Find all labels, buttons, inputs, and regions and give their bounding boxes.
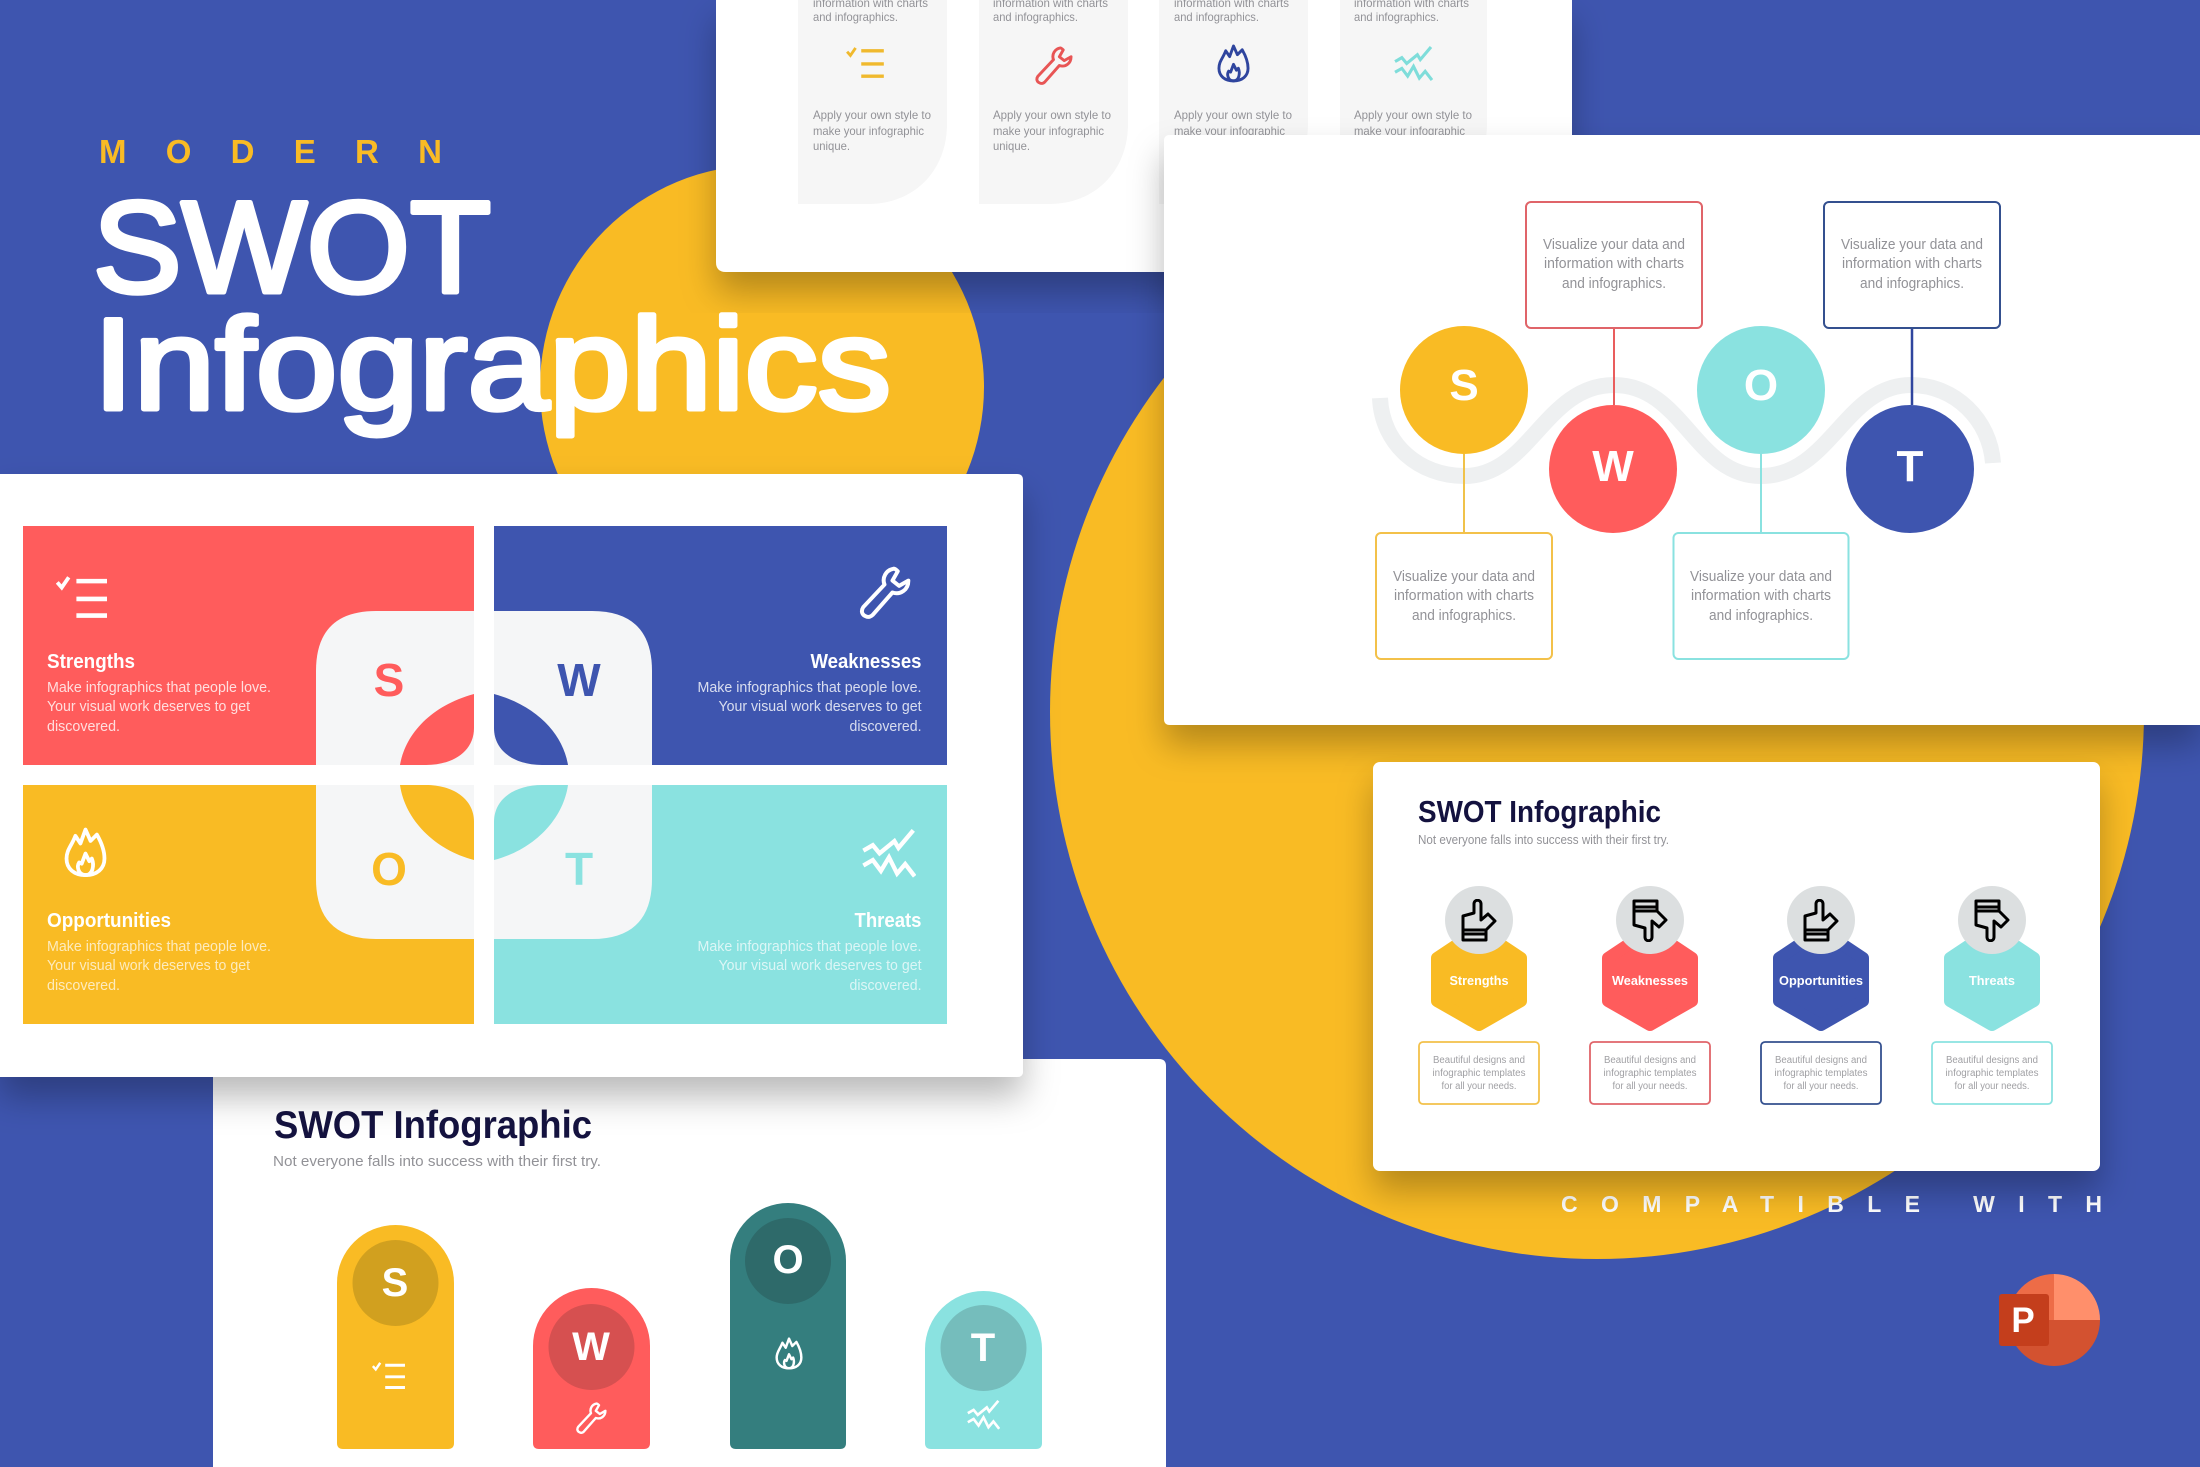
quadrant: threats: T: [565, 843, 593, 895]
bar: S: S: [382, 1261, 408, 1305]
quadrant: strengths: [23, 526, 474, 765]
quadrant: strengths: Your visual work deserves to get: [47, 699, 250, 715]
bar: S: [337, 1225, 454, 1449]
compatible with label: COMPATIBLE WITH: [1561, 1191, 2102, 1217]
column: weaknesses: make your infographic: [993, 124, 1104, 138]
bar: T: [925, 1291, 1042, 1449]
node W with callout: W: [1592, 442, 1634, 491]
quadrant: opportunities: O: [371, 843, 407, 895]
node S with callout: S: [1449, 361, 1479, 410]
quadrant: weaknesses: discovered.: [850, 719, 922, 735]
panel: bars slide, bottom: [213, 1059, 1166, 1467]
quadrant: threats: Make infographics that people love.: [698, 939, 922, 955]
card: weaknesses: Weaknesses: [1612, 973, 1688, 988]
node W with callout: information with charts: [1544, 256, 1684, 272]
column: opportunities: and infographics.: [1174, 10, 1259, 24]
icon: PowerPoint logo: P: [2011, 1301, 2035, 1340]
panel: four column cards, top: [716, 0, 1572, 272]
card: weaknesses: infographic templates: [1604, 1068, 1696, 1079]
card: strengths: [1419, 886, 1539, 1104]
card: threats: Beautiful designs and: [1946, 1055, 2038, 1066]
card: opportunities: Opportunities: [1779, 973, 1863, 988]
quadrant: threats: Your visual work deserves to get: [718, 958, 922, 974]
column: strengths: Apply your own style to: [813, 108, 931, 122]
column: weaknesses: Apply your own style to: [993, 108, 1111, 122]
heading: SWOT Infographic: [1418, 794, 1661, 829]
column: threats: and infographics.: [1354, 10, 1439, 24]
subtitle: Not everyone falls into success with their first try.: [273, 1153, 601, 1170]
column: opportunities: make your infographic: [1174, 124, 1285, 138]
panel: hexagon SWOT slide: [1373, 762, 2100, 1171]
title eyebrow: MODERN: [99, 133, 442, 170]
subtitle: Not everyone falls into success with their first try.: [1418, 833, 1669, 847]
large yellow circle: [1050, 165, 2144, 1259]
column: threats: Apply your own style to: [1354, 108, 1472, 122]
card: opportunities: infographic templates: [1774, 1068, 1868, 1079]
column: weaknesses: and infographics.: [993, 10, 1078, 24]
node O with callout: Visualize your data and: [1690, 569, 1832, 585]
main title: Infographics: [93, 291, 891, 437]
main title: SWOT: [93, 174, 491, 320]
node O with callout: [1674, 326, 1848, 659]
wave path: [1380, 385, 1993, 476]
card: threats: for all your needs.: [1954, 1081, 2030, 1092]
column: opportunities: [1159, 0, 1308, 204]
node S with callout: information with charts: [1394, 588, 1534, 604]
card: weaknesses: [1590, 886, 1710, 1104]
bar: W: W: [572, 1325, 610, 1369]
quadrant: opportunities: Make infographics that people love.: [47, 939, 271, 955]
decorative yellow circle behind title: [540, 165, 984, 609]
quadrant: opportunities: [23, 785, 474, 1024]
column: weaknesses: unique.: [993, 139, 1030, 153]
column: threats: [1340, 0, 1487, 204]
quadrant: weaknesses: [494, 526, 947, 765]
panel: SWOT quadrant slide, left: [0, 474, 1023, 1077]
quadrant: strengths: Strengths: [47, 651, 135, 673]
quadrant: opportunities: Opportunities: [47, 910, 171, 932]
column: strengths: unique.: [813, 139, 850, 153]
card: threats: Threats: [1969, 973, 2015, 988]
card: threats: infographic templates: [1946, 1068, 2038, 1079]
quadrant: weaknesses: Make infographics that people love.: [698, 680, 922, 696]
column: strengths: make your infographic: [813, 124, 924, 138]
column: strengths: [798, 0, 947, 204]
node O with callout: and infographics.: [1709, 608, 1813, 624]
quadrant: threats: Threats: [854, 910, 922, 932]
node W with callout: [1526, 202, 1702, 533]
node W with callout: and infographics.: [1562, 276, 1666, 292]
node W with callout: Visualize your data and: [1543, 237, 1685, 253]
quadrant: opportunities: Your visual work deserves to get: [47, 958, 250, 974]
node T with callout: [1824, 202, 2000, 533]
node T with callout: T: [1897, 442, 1924, 491]
card: opportunities: for all your needs.: [1784, 1081, 1858, 1092]
card: opportunities: Beautiful designs and: [1775, 1055, 1867, 1066]
node O with callout: information with charts: [1691, 588, 1831, 604]
node S with callout: Visualize your data and: [1393, 569, 1535, 585]
quadrant: threats: discovered.: [850, 978, 922, 994]
node O with callout: O: [1744, 361, 1778, 410]
column: strengths: and infographics.: [813, 10, 898, 24]
node T with callout: and infographics.: [1860, 276, 1964, 292]
quadrant: strengths: S: [374, 654, 404, 706]
quadrant: weaknesses: Weaknesses: [810, 651, 922, 673]
node S with callout: [1376, 326, 1552, 659]
quadrant: weaknesses: Your visual work deserves to get: [718, 699, 922, 715]
node T with callout: information with charts: [1842, 256, 1982, 272]
card: strengths: infographic templates: [1432, 1068, 1526, 1079]
quadrant: threats: [494, 785, 947, 1024]
quadrant: strengths: Make infographics that people love.: [47, 680, 271, 696]
column: opportunities: Apply your own style to: [1174, 108, 1292, 122]
node T with callout: Visualize your data and: [1841, 237, 1983, 253]
heading: SWOT Infographic: [274, 1104, 592, 1147]
quadrant: opportunities: discovered.: [47, 978, 120, 994]
column: weaknesses: [979, 0, 1128, 204]
panel: timeline wave, right: [1164, 135, 2200, 725]
column: threats: make your infographic: [1354, 124, 1465, 138]
node S with callout: and infographics.: [1412, 608, 1516, 624]
bar: W: [533, 1288, 650, 1449]
quadrant: strengths: discovered.: [47, 719, 120, 735]
card: strengths: Beautiful designs and: [1433, 1055, 1525, 1066]
card: strengths: Strengths: [1450, 973, 1508, 988]
bar: O: O: [772, 1238, 804, 1282]
card: threats: [1932, 886, 2052, 1104]
bar: O: [730, 1203, 846, 1449]
icon: PowerPoint logo: [1999, 1274, 2100, 1366]
bar: T: T: [971, 1326, 995, 1370]
card: weaknesses: Beautiful designs and: [1604, 1055, 1696, 1066]
card: strengths: for all your needs.: [1442, 1081, 1516, 1092]
card: weaknesses: for all your needs.: [1612, 1081, 1688, 1092]
card: opportunities: [1761, 886, 1881, 1104]
quadrant: weaknesses: W: [557, 654, 601, 706]
main title: [93, 174, 891, 437]
